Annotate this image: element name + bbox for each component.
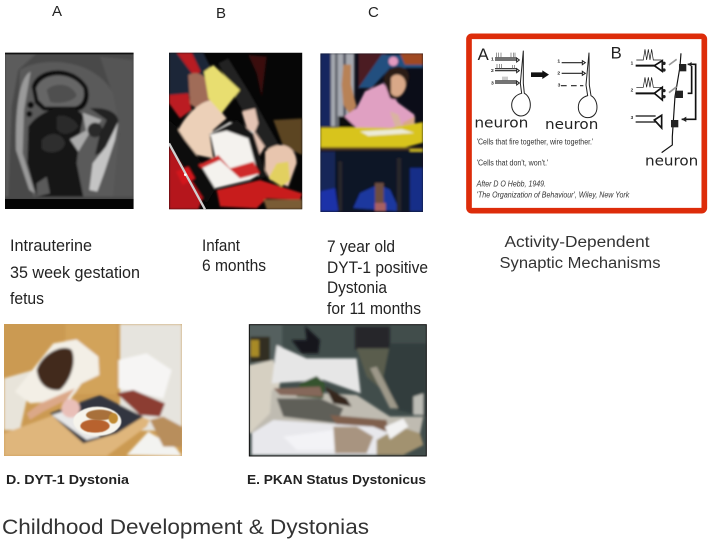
labels A and B: A: [478, 45, 490, 64]
panel: synaptic mechanisms diagram: 3: [631, 115, 634, 120]
Hebb quotations: [476, 137, 630, 200]
caption C: DYT-1 positive: [327, 259, 428, 277]
Hebb quotations: 'Cells that don't, won't.': [477, 158, 549, 167]
neuron labels: neuron: [645, 154, 698, 170]
caption A: fetus: [10, 290, 44, 308]
caption B: [202, 237, 266, 275]
panel: synaptic mechanisms diagram: B: [611, 44, 622, 63]
neuron labels: neuron: [545, 117, 598, 133]
photo C: 7 year old girl at desk: [320, 53, 423, 212]
caption B: 6 months: [202, 257, 266, 275]
diagram A before: [495, 51, 530, 116]
panel label B: B: [216, 5, 226, 22]
caption C: 7 year old: [327, 238, 395, 256]
caption E: E. PKAN Status Dystonicus: [247, 472, 426, 487]
caption C: Dystonia: [327, 279, 388, 297]
panel label C: C: [368, 4, 379, 21]
panel: synaptic mechanisms diagram: 3: [558, 83, 561, 89]
caption D: D. DYT-1 Dystonia: [6, 472, 130, 487]
panel: synaptic mechanisms diagram: 2: [631, 87, 634, 92]
photo border: [249, 325, 426, 456]
caption C: [327, 238, 428, 318]
diagram B synapses: [636, 49, 696, 153]
caption B: Infant: [202, 237, 240, 255]
caption A: 35 week gestation: [10, 264, 140, 282]
panel: synaptic mechanisms diagram: 1: [491, 57, 494, 63]
diagram caption: Activity-Dependent: [504, 234, 650, 251]
caption C: for 11 months: [327, 300, 421, 318]
Hebb quotations: 'The Organization of Behaviour', Wiley, New York: [477, 191, 630, 200]
photo A: fetal MRI: [5, 53, 134, 209]
caption A: [10, 237, 140, 308]
panel: synaptic mechanisms diagram: 1: [631, 60, 634, 65]
panel: synaptic mechanisms diagram: 2: [557, 70, 560, 76]
diagram caption: Synaptic Mechanisms: [500, 255, 661, 272]
arrow: [531, 70, 549, 79]
panel: synaptic mechanisms diagram: 1: [557, 58, 560, 64]
photo D: boy bent over meal tray: [4, 324, 182, 456]
Hebb quotations: 'Cells that fire together, wire together.': [477, 137, 594, 146]
panel label A: A: [52, 3, 62, 20]
diagram A after: [561, 53, 597, 118]
title: Childhood Development & Dystonias: [2, 516, 369, 539]
caption A: Intrauterine: [10, 237, 92, 255]
neuron labels: neuron: [474, 115, 528, 131]
photo E: child in hospital bed: [249, 324, 427, 456]
panel: synaptic mechanisms diagram: 3: [491, 80, 494, 86]
photo B: infant in stroller: [169, 53, 302, 209]
diagram caption: [500, 234, 661, 272]
neuron labels: [474, 115, 698, 170]
panel: synaptic mechanisms diagram: 2: [491, 68, 494, 74]
red frame: [469, 36, 704, 211]
Hebb quotations: After D O Hebb, 1949.: [476, 180, 546, 189]
panel: synaptic mechanisms diagram: [469, 36, 704, 211]
